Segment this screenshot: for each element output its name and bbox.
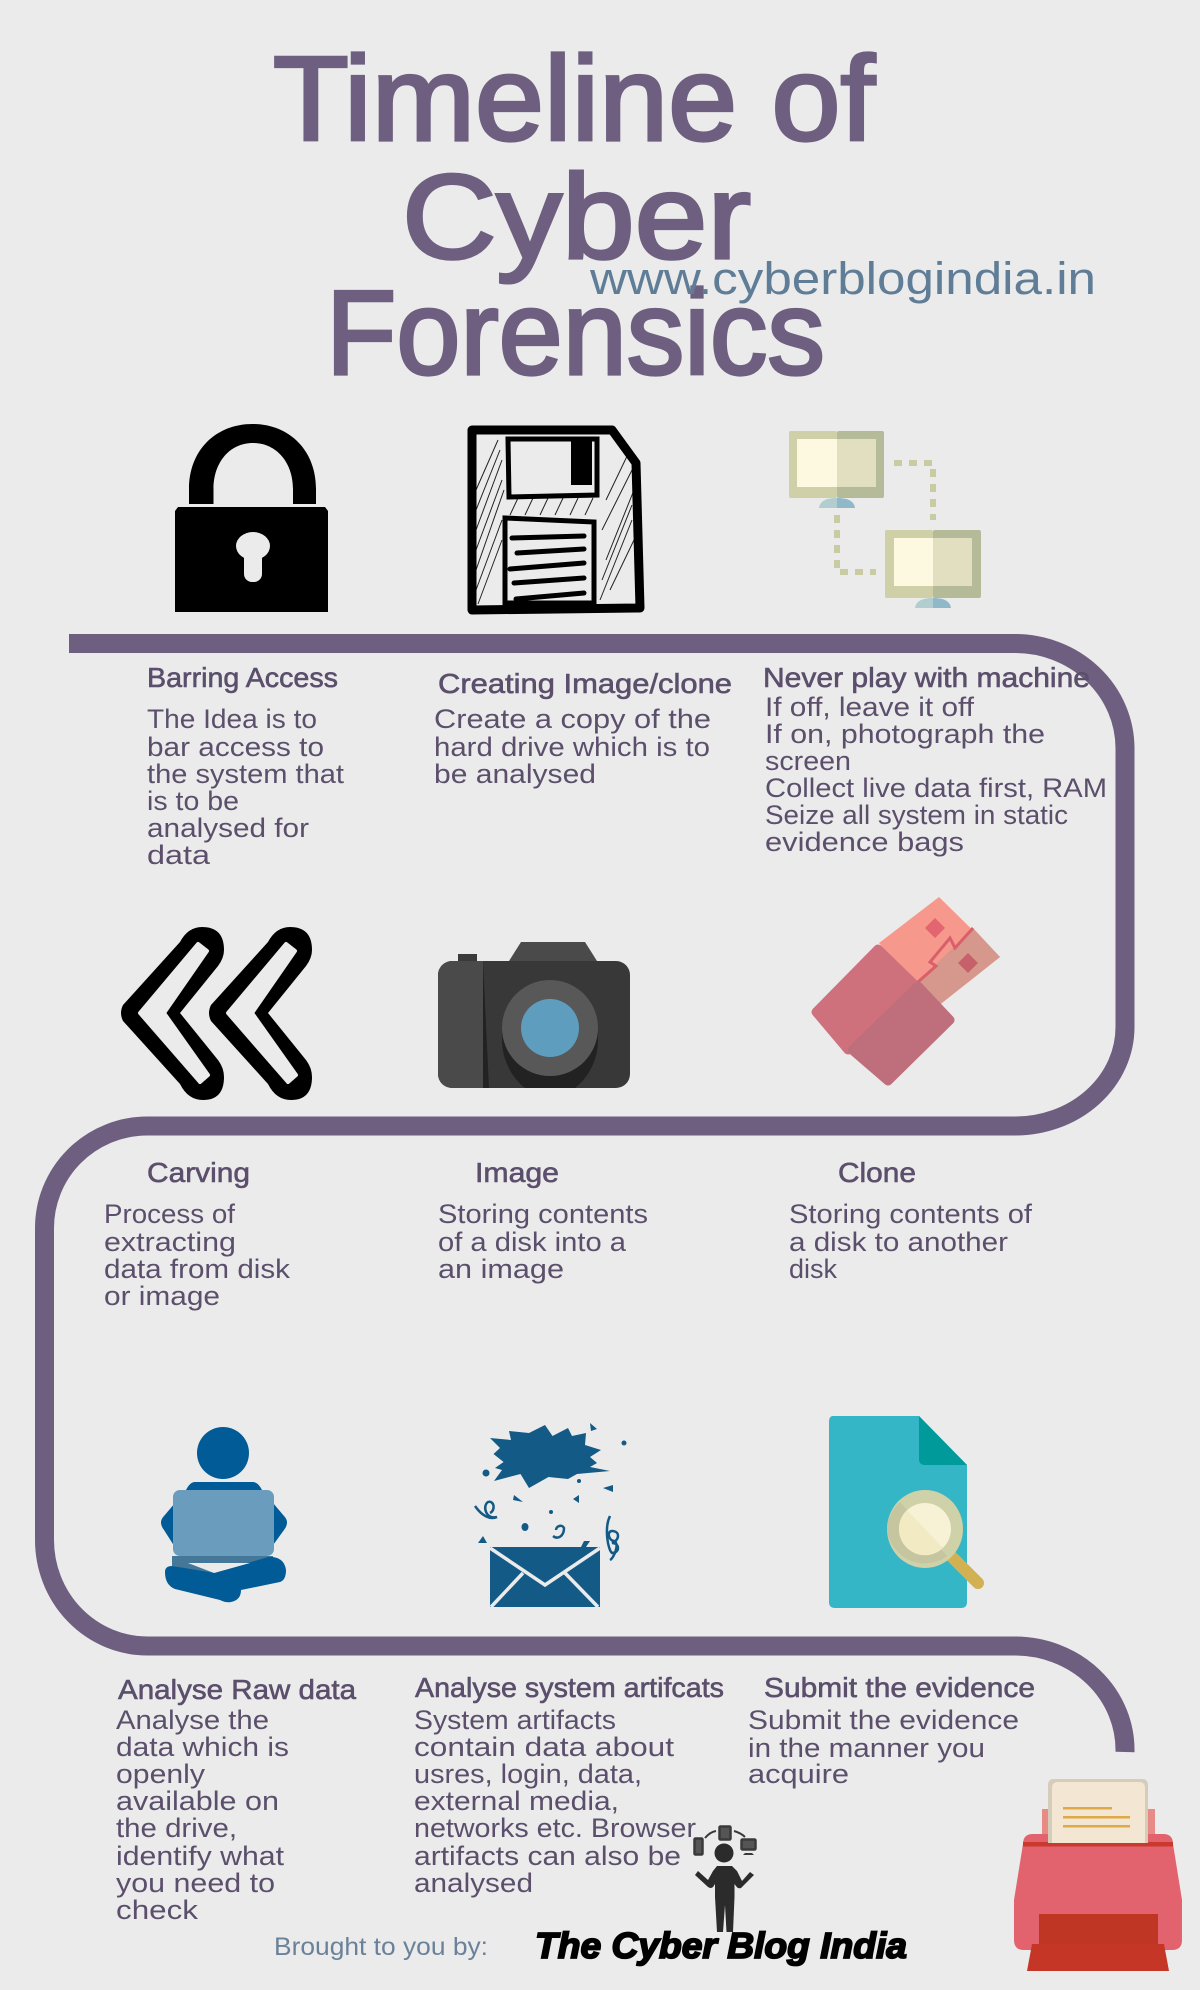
text: barring access body: The Idea is to [147, 704, 317, 734]
text: carving body: data from disk [104, 1254, 291, 1284]
text: never play with machine body: If on, photograph the [765, 719, 1045, 749]
panel: submit the evidence [748, 1672, 1035, 1789]
icon: padlock [175, 424, 328, 612]
website url: www.cyberblogindia.in [589, 253, 1096, 304]
title: Cyber [402, 150, 751, 284]
title: Forensics [326, 266, 825, 400]
text: clone body: Storing contents of [789, 1199, 1033, 1229]
text: submit the evidence body: in the manner you [748, 1733, 985, 1763]
text: analyse system artifacts body: external media, [414, 1786, 619, 1816]
text: image body: an image [438, 1254, 564, 1284]
panel: clone [789, 1157, 1033, 1284]
heading: submit the evidence: Submit the evidence [764, 1672, 1035, 1703]
heading: creating image/clone: Creating Image/clone [438, 668, 732, 699]
heading: never play with machine: Never play with machine [763, 662, 1090, 693]
heading: image: Image [475, 1157, 559, 1188]
text: analyse raw data body: openly [116, 1759, 206, 1789]
text: image body: Storing contents [438, 1199, 648, 1229]
timeline path [44, 644, 1125, 1752]
icon: envelope with splash [475, 1423, 626, 1607]
text: analyse raw data body: identify what [116, 1841, 285, 1871]
text: barring access body: bar access to [147, 732, 324, 762]
text: analyse system artifacts body: networks etc. Browser [414, 1813, 696, 1843]
panel: never play with machine [763, 662, 1107, 857]
panel: carving [104, 1157, 291, 1311]
heading: analyse raw data: Analyse Raw data [118, 1674, 356, 1705]
text: barring access body: the system that [147, 759, 345, 789]
icon: usb drive [816, 897, 1000, 1081]
text: image body: of a disk into a [438, 1227, 627, 1257]
text: never play with machine body: evidence bags [765, 827, 964, 857]
text: analyse raw data body: check [116, 1895, 199, 1925]
text: analyse system artifacts body: System artifacts [414, 1705, 616, 1735]
text: creating image body [434, 704, 711, 789]
panel: image [438, 1157, 648, 1284]
text: carving body: or image [104, 1281, 220, 1311]
text: analyse system artifacts body: contain data about [414, 1732, 675, 1762]
text: carving body: extracting [104, 1227, 236, 1257]
text: creating image body: hard drive which is to [434, 732, 710, 762]
text: never play with machine body: Seize all system in static [765, 800, 1068, 830]
text: never play with machine body [765, 692, 1107, 857]
logo wordmark: The Cyber Blog India [535, 1925, 907, 1966]
text: clone body [789, 1199, 1033, 1284]
icon: printer [1014, 1779, 1182, 1971]
title [273, 32, 876, 400]
credit: brought to you by: Brought to you by: [274, 1933, 488, 1961]
text: barring access body: is to be [147, 786, 239, 816]
text: clone body: disk [789, 1254, 837, 1284]
text: submit the evidence body: acquire [748, 1759, 849, 1789]
icon: sketched floppy disk [472, 430, 640, 610]
heading: barring access: Barring Access [147, 662, 338, 693]
text: analyse raw data body: the drive, [116, 1813, 237, 1843]
title: Timeline of [273, 32, 876, 166]
text: clone body: a disk to another [789, 1227, 1008, 1257]
panel: creating image [434, 668, 732, 789]
icon: person with laptop [161, 1427, 287, 1602]
icon: connected monitors [789, 431, 981, 608]
text: carving body: Process of [104, 1199, 236, 1229]
text: barring access body: data [147, 840, 211, 870]
text: analyse system artifacts body: artifacts can also be [414, 1841, 681, 1871]
text: submit the evidence body [748, 1705, 1019, 1789]
text: barring access body: analysed for [147, 813, 309, 843]
icon: document with magnifier [829, 1416, 978, 1608]
text: never play with machine body: If off, leave it off [765, 692, 975, 722]
panel: analyse system artifacts [414, 1672, 724, 1898]
text: creating image body: Create a copy of the [434, 704, 711, 734]
icon: double chevrons [121, 927, 312, 1100]
text: creating image body: be analysed [434, 759, 596, 789]
text: carving body [104, 1199, 291, 1311]
text: analyse raw data body: available on [116, 1786, 279, 1816]
heading: clone: Clone [838, 1157, 916, 1188]
text: analyse system artifacts body: analysed [414, 1868, 533, 1898]
text: analyse system artifacts body: usres, login, data, [414, 1759, 642, 1789]
text: never play with machine body: Collect live data first, RAM [765, 773, 1107, 803]
text: analyse raw data body: Analyse the [116, 1705, 269, 1735]
text: never play with machine body: screen [765, 746, 851, 776]
text: analyse system artifacts body [414, 1705, 696, 1898]
heading: analyse system artifcats: Analyse system artifcats [415, 1672, 724, 1703]
text: submit the evidence body: Submit the evidence [748, 1705, 1019, 1735]
text: barring access body [147, 704, 345, 870]
panel: analyse raw data [116, 1674, 356, 1925]
text: analyse raw data body [116, 1705, 289, 1925]
heading: carving: Carving [147, 1157, 250, 1188]
text: image body [438, 1199, 648, 1284]
logo: cyber blog india mascot [694, 1826, 756, 1932]
icon: camera [438, 942, 630, 1088]
text: analyse raw data body: you need to [116, 1868, 275, 1898]
text: analyse raw data body: data which is [116, 1732, 289, 1762]
panel: barring access [147, 662, 345, 870]
